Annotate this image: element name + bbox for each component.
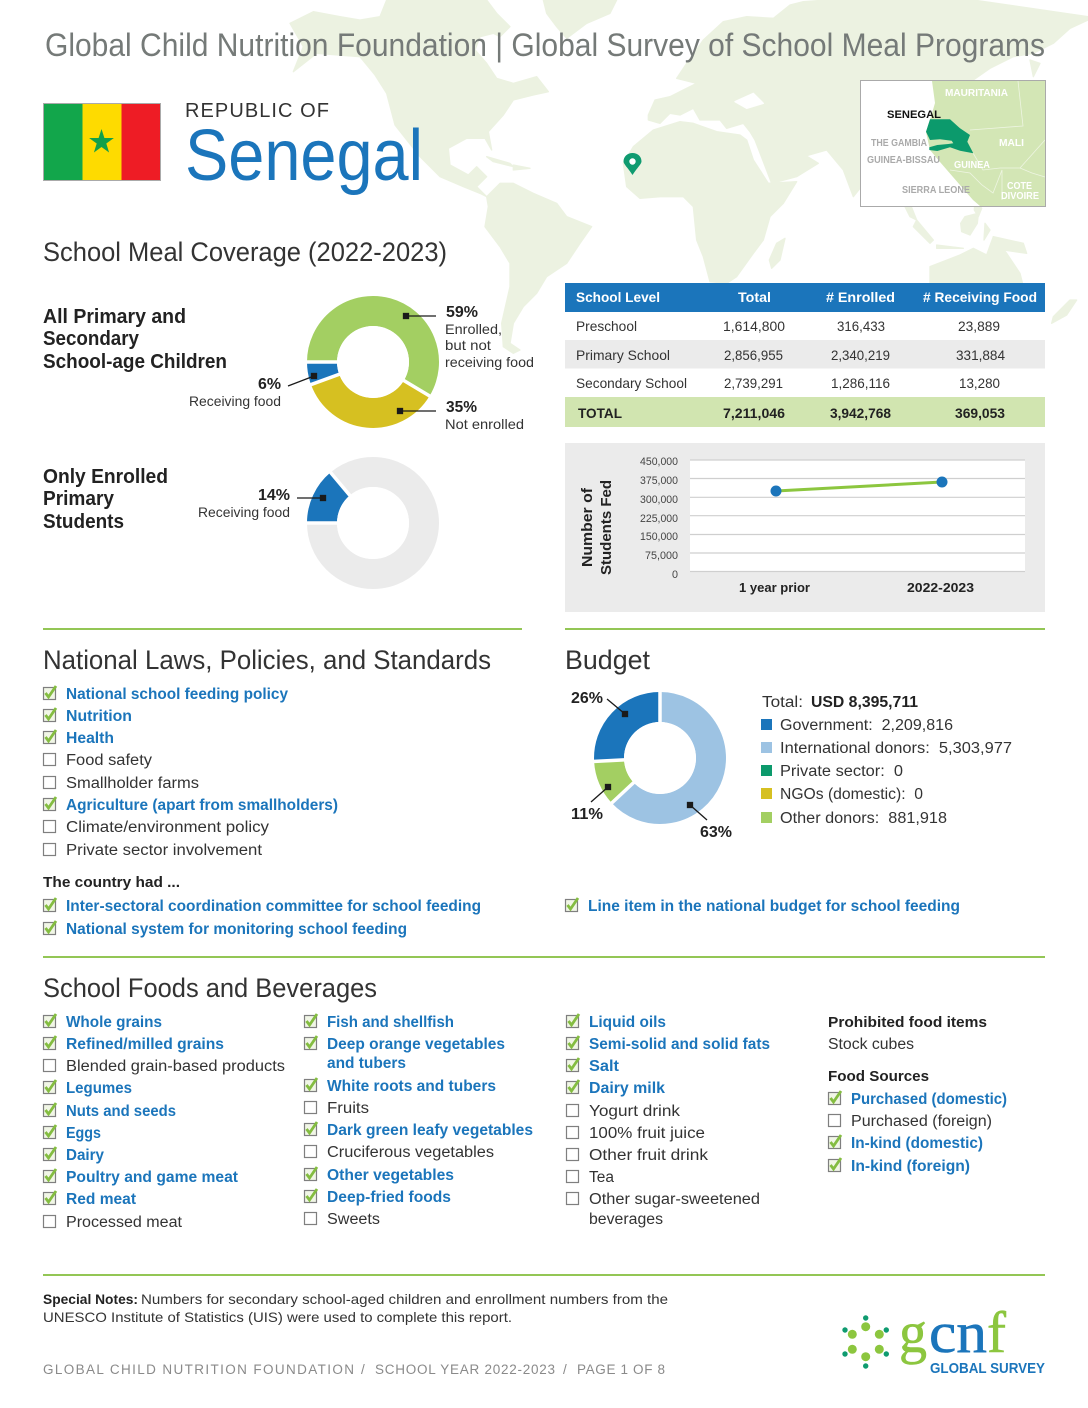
- item: in-kind foreign: In-kind (foreign): [851, 1158, 970, 1175]
- item: purchased domestic: Purchased (domestic): [851, 1091, 1007, 1108]
- item: white roots: White roots and tubers: [327, 1078, 496, 1095]
- callout: 6%: Receiving food: [189, 393, 281, 409]
- line chart: number of students fed: 1 year prior: [739, 580, 810, 595]
- country name: Senegal: [185, 116, 423, 196]
- legend: budget: International donors: 5,303,977: [780, 740, 1012, 757]
- item: monitoring system: National system for monitoring school feeding: [66, 921, 407, 938]
- legend: budget: Total:: [762, 694, 803, 711]
- logo: gcnf global survey: f: [987, 1300, 1007, 1365]
- logo: gcnf global survey: GLOBAL SURVEY: [930, 1360, 1045, 1377]
- item: smallholder farms: Smallholder farms: [66, 775, 199, 792]
- line chart: number of students fed: 375,000: [640, 475, 678, 487]
- table: school level enrollment: 369,053: [955, 405, 1005, 421]
- item: in-kind domestic: In-kind (domestic): [851, 1135, 983, 1152]
- table: school level enrollment: 1,286,116: [831, 375, 890, 391]
- item: nuts and seeds: Nuts and seeds: [66, 1103, 176, 1120]
- item: blended grain products: Blended grain-based products: [66, 1058, 285, 1075]
- legend: budget: USD 8,395,711: [811, 694, 918, 711]
- line chart: number of students fed: 0: [672, 569, 678, 581]
- legend: budget: NGOs (domestic): 0: [780, 786, 923, 803]
- line chart: number of students fed: Students Fed: [598, 480, 615, 575]
- item: refined grains: Refined/milled grains: [66, 1036, 224, 1053]
- logo: gcnf global survey: cn: [929, 1300, 987, 1365]
- item: sweets: Sweets: [327, 1211, 380, 1228]
- table: school level enrollment: 1,614,800: [723, 318, 785, 334]
- label: only enrolled primary students: Students: [43, 510, 124, 533]
- table: school level enrollment: School Level: [576, 289, 660, 305]
- checklist: national laws and policies: [44, 686, 338, 859]
- item: salt: [566, 1058, 619, 1075]
- inset location map: SIERRA LEONE: [902, 185, 970, 196]
- item: purchased foreign: Purchased (foreign): [851, 1113, 992, 1130]
- donut chart: budget: 11%: [571, 806, 603, 823]
- item: other sugar-sweetened beverages: [566, 1191, 760, 1228]
- donut chart: all children coverage: [288, 311, 436, 414]
- table: school level enrollment: 13,280: [959, 375, 1000, 391]
- table: school level enrollment: 7,211,046: [723, 405, 785, 421]
- inset location map: [860, 80, 1046, 206]
- special notes: Special Notes:: [43, 1291, 138, 1307]
- item: other fruit drink: Other fruit drink: [589, 1147, 708, 1164]
- callout: 59%: but not: [445, 337, 491, 353]
- legend: budget: Other donors: 881,918: [780, 810, 947, 827]
- item: line item in national budget: Line item in the national budget for school feeding: [588, 898, 960, 915]
- item: tea: [566, 1169, 614, 1186]
- label: only enrolled primary students: [43, 465, 168, 533]
- table: school level enrollment: Secondary School: [576, 375, 687, 391]
- item: national school feeding policy: National school feeding policy: [66, 686, 288, 703]
- checklist: food sources: Food Sources: [828, 1068, 929, 1085]
- item: tea: Tea: [589, 1169, 614, 1186]
- heading: national laws: National Laws, Policies, and Standards: [43, 645, 491, 675]
- checklist: coordination and monitoring: [44, 898, 481, 938]
- icon: flag of Senegal: [44, 104, 160, 180]
- inset location map: MALI: [999, 138, 1024, 149]
- item: dark green vegetables: Dark green leafy vegetables: [327, 1122, 533, 1139]
- item: other sugar-sweetened beverages: Other sugar-sweetened: [589, 1191, 760, 1208]
- footer: GLOBAL CHILD NUTRITION FOUNDATION: [43, 1362, 354, 1377]
- item: private sector involvement: Private sector involvement: [66, 842, 263, 859]
- callout: 6%: 6%: [258, 376, 281, 393]
- label: all primary and secondary children: [43, 305, 227, 373]
- label: only enrolled primary students: Only Enrolled: [43, 465, 168, 488]
- item: fruits: [304, 1100, 369, 1117]
- checklist: foods column 3: [566, 1014, 770, 1228]
- item: sweets: [304, 1211, 380, 1228]
- callout: 59%: receiving food: [445, 354, 534, 370]
- inset location map: GUINEA-BISSAU: [867, 155, 940, 166]
- item: eggs: Eggs: [66, 1125, 101, 1142]
- table: school level enrollment: Primary School: [576, 347, 670, 363]
- item: whole grains: Whole grains: [66, 1014, 162, 1031]
- item: liquid oils: Liquid oils: [589, 1014, 666, 1031]
- item: poultry and game meat: Poultry and game meat: [66, 1169, 238, 1186]
- inset location map: THE GAMBIA: [871, 138, 927, 149]
- footer: [43, 1362, 665, 1377]
- legend: budget: [761, 694, 1012, 827]
- item: coordination committee: Inter-sectoral coordination committee for school feeding: [66, 898, 481, 915]
- logo: gcnf global survey: g: [899, 1300, 927, 1365]
- table: school level enrollment: TOTAL: [578, 405, 622, 421]
- item: deep orange vegetables: Deep orange vegetables: [327, 1036, 505, 1053]
- label: only enrolled primary students: Primary: [43, 487, 115, 510]
- item: deep-fried foods: Deep-fried foods: [327, 1189, 451, 1206]
- item: other vegetables: Other vegetables: [327, 1167, 454, 1184]
- heading: School Meal Coverage: School Meal Coverage (2022-2023): [43, 237, 447, 267]
- callout: 35%: 35%: [446, 399, 477, 416]
- callout: 35%: Not enrolled: [445, 416, 524, 432]
- item: fruits: Fruits: [327, 1100, 369, 1117]
- callout: 59%: Enrolled,: [445, 321, 502, 337]
- table: school level enrollment: 2,856,955: [724, 347, 783, 363]
- item: red meat: Red meat: [66, 1191, 136, 1208]
- checklist: food sources: [828, 1068, 1007, 1175]
- footer: SCHOOL YEAR 2022-2023: [375, 1362, 555, 1377]
- line chart: number of students fed: 150,000: [640, 531, 678, 543]
- line chart: number of students fed: Number of: [579, 487, 596, 567]
- line chart: number of students fed: 300,000: [640, 494, 678, 506]
- table: school level enrollment: # Receiving Food: [923, 289, 1037, 305]
- item: yogurt drink: Yogurt drink: [589, 1103, 680, 1120]
- callout: 14%: [198, 487, 290, 520]
- heading: budget: Budget: [565, 645, 650, 675]
- checklist: foods column 1: [44, 1014, 285, 1231]
- item: eggs: [44, 1125, 101, 1142]
- donut chart: budget: 26%: [571, 690, 603, 707]
- checklist: foods column 2: [304, 1014, 533, 1228]
- table: school level enrollment: 3,942,768: [830, 405, 891, 421]
- donut chart: budget: [571, 688, 732, 841]
- label: all primary and secondary children: All Primary and: [43, 305, 186, 328]
- footer: /: [563, 1362, 567, 1377]
- table: school level enrollment: 2,739,291: [724, 375, 783, 391]
- inset location map: MAURITANIA: [945, 88, 1008, 99]
- line chart: number of students fed: 450,000: [640, 456, 678, 468]
- heading: school foods: School Foods and Beverages: [43, 973, 377, 1003]
- table: school level enrollment: Total: [738, 289, 771, 305]
- table: school level enrollment: 331,884: [956, 347, 1005, 363]
- item: fish and shellfish: Fish and shellfish: [327, 1014, 454, 1031]
- icon: map pin: [624, 153, 642, 175]
- inset location map: GUINEA: [954, 160, 990, 171]
- special notes: Numbers for secondary school-aged children and enrollment numbers from the: [141, 1291, 668, 1307]
- callout: 59%: 59%: [446, 304, 478, 321]
- line chart: number of students fed: 2022-2023: [907, 580, 974, 595]
- legend: budget: Government: 2,209,816: [780, 717, 953, 734]
- legend: budget: Private sector: 0: [780, 763, 903, 780]
- item: agriculture: Agriculture (apart from smallholders): [66, 797, 338, 814]
- item: semi-solid fats: Semi-solid and solid fats: [589, 1036, 770, 1053]
- item: nutrition: Nutrition: [66, 708, 132, 725]
- table: school level enrollment: 316,433: [837, 318, 885, 334]
- line chart: number of students fed: 75,000: [645, 550, 678, 562]
- item: dairy milk: Dairy milk: [589, 1080, 665, 1097]
- block: prohibited food items: Prohibited food items: [828, 1014, 987, 1031]
- table: school level enrollment: Preschool: [576, 318, 637, 334]
- item: deep orange vegetables: and tubers: [327, 1055, 406, 1072]
- block: prohibited food items: [828, 1014, 987, 1053]
- table: school level enrollment: [565, 283, 1045, 427]
- item: health: Health: [66, 730, 114, 747]
- special notes: UNESCO Institute of Statistics (UIS) were used to complete this report.: [43, 1309, 512, 1325]
- logo: gcnf global survey: [842, 1300, 1045, 1377]
- table: school level enrollment: 2,340,219: [831, 347, 890, 363]
- footer: /: [361, 1362, 365, 1377]
- item: health: [44, 730, 114, 747]
- item: legumes: Legumes: [66, 1080, 132, 1097]
- line chart: number of students fed: [565, 443, 1045, 612]
- table: school level enrollment: 23,889: [958, 318, 1000, 334]
- item: other sugar-sweetened beverages: beverages: [589, 1211, 663, 1228]
- special notes: [43, 1291, 668, 1325]
- inset location map: SENEGAL: [887, 109, 941, 121]
- callout: 14%: Receiving food: [198, 504, 290, 520]
- callout: 59%: [445, 304, 534, 370]
- callout: 6%: [189, 376, 281, 409]
- item: salt: Salt: [589, 1058, 619, 1075]
- callout: 35%: [445, 399, 524, 432]
- footer: PAGE 1 OF 8: [577, 1362, 665, 1377]
- donut chart: enrolled primary students: [297, 469, 424, 574]
- label: all primary and secondary children: Secondary: [43, 327, 140, 350]
- inset location map: COTE: [1007, 181, 1032, 192]
- inset location map: DIVOIRE: [1001, 191, 1039, 202]
- country name: REPUBLIC OF: [185, 100, 329, 122]
- page title: Global Child Nutrition Foundation | Global Survey of School Meal Programs: [45, 27, 1045, 63]
- block: prohibited food items: Stock cubes: [828, 1036, 914, 1053]
- item: processed meat: Processed meat: [66, 1214, 183, 1231]
- item: dairy: [44, 1147, 104, 1164]
- item: climate policy: Climate/environment policy: [66, 819, 269, 836]
- text: the country had: The country had ...: [43, 874, 180, 891]
- item: deep orange vegetables: [304, 1036, 505, 1072]
- label: all primary and secondary children: School-age Children: [43, 350, 227, 373]
- background world map: [290, 0, 1088, 353]
- line chart: number of students fed: 225,000: [640, 513, 678, 525]
- table: school level enrollment: # Enrolled: [826, 289, 895, 305]
- item: food safety: Food safety: [66, 752, 152, 769]
- donut chart: budget: 63%: [700, 824, 732, 841]
- item: fruit juice: 100% fruit juice: [589, 1125, 705, 1142]
- item: cruciferous vegetables: Cruciferous vegetables: [327, 1144, 494, 1161]
- item: dairy: Dairy: [66, 1147, 104, 1164]
- callout: 14%: 14%: [258, 487, 290, 504]
